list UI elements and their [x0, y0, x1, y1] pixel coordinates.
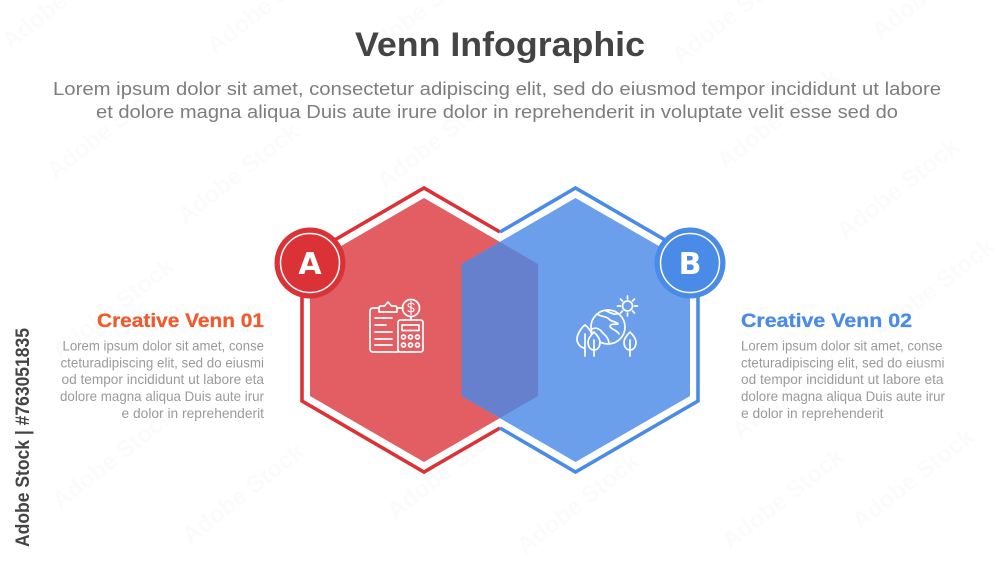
- left text block: [60, 311, 264, 421]
- body text right: dolore magna aliqua Duis aute irur: [741, 388, 945, 404]
- overlap region: [462, 242, 538, 418]
- body text right: cteturadipiscing elit, sed do eiusmi: [741, 354, 944, 370]
- body text right: Lorem ipsum dolor sit amet, conse: [741, 338, 943, 354]
- venn diagram: [274, 188, 726, 472]
- intro paragraph: et dolore magna aliqua Duis aute irure dolor in reprehenderit in voluptate velit esse sed do: [96, 102, 898, 122]
- badge A: [274, 228, 346, 298]
- stock id vertical label: Adobe Stock | #763051835: [13, 328, 34, 547]
- heading: Creative Venn 01: Creative Venn 01: [97, 311, 264, 332]
- red hexagon fill: [310, 198, 538, 462]
- heading: Creative Venn 02: Creative Venn 02: [741, 311, 912, 332]
- body text right: e dolor in reprehenderit: [741, 405, 884, 421]
- badge B: B: [679, 247, 701, 282]
- intro paragraph: [53, 79, 941, 122]
- body text left: cteturadipiscing elit, sed do eiusmi: [60, 354, 264, 370]
- intro paragraph: Lorem ipsum dolor sit amet, consectetur adipiscing elit, sed do eiusmod tempor incididunt ut labore: [53, 79, 941, 99]
- body text left: Lorem ipsum dolor sit amet, conse: [62, 338, 264, 354]
- icon: clipboard and calculator: [370, 300, 423, 352]
- body text left: [60, 338, 264, 421]
- badge B: [654, 228, 726, 298]
- right text block: [741, 311, 945, 421]
- body text right: od tempor incididunt ut labore eta: [741, 371, 944, 387]
- red hexagon outline: [302, 188, 500, 472]
- body text left: od tempor incididunt ut labore eta: [62, 371, 264, 387]
- body text right: [741, 338, 945, 421]
- body text left: e dolor in reprehenderit: [122, 405, 264, 421]
- body text left: dolore magna aliqua Duis aute irur: [60, 388, 264, 404]
- blue hexagon outline: [500, 188, 698, 472]
- blue hexagon fill: [462, 198, 690, 462]
- title: Venn Infographic: [355, 26, 645, 64]
- badge A: A: [298, 247, 322, 282]
- icon: globe, sun and trees: [577, 296, 638, 356]
